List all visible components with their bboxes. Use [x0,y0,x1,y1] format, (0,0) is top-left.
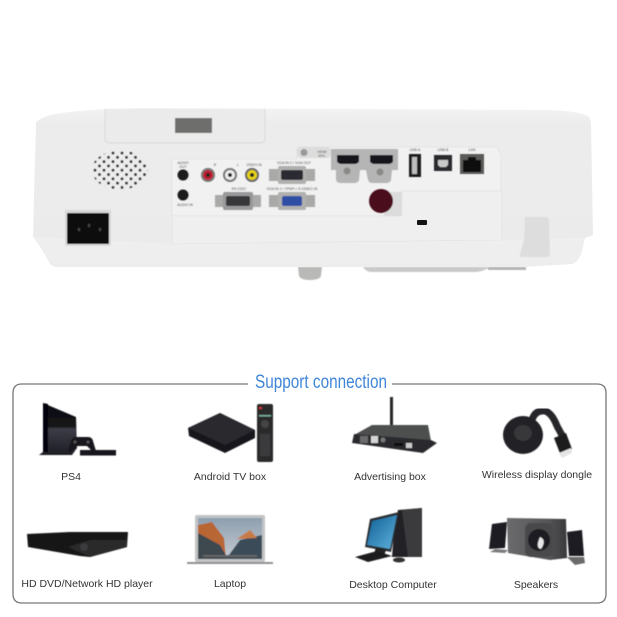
audio ports: AUDIO IN [177,203,193,207]
device: Desktop Computer [349,508,437,591]
HDMI ports [331,149,398,183]
icon: speaker set [489,518,585,565]
label: Desktop Computer [349,579,437,591]
USB and LAN ports: USB-B [438,148,449,152]
icon: TV box and remote [188,404,273,462]
USB and LAN ports: USB-A [410,148,421,152]
VGA and serial ports: VGA IN 1 / YPbPr / S-VIDEO IN [267,187,318,191]
HDMI badge: HDMI [318,150,326,154]
USB and LAN ports [409,148,484,177]
device: Laptop [187,515,273,590]
icon: dongle [503,411,572,458]
USB and LAN ports: LAN [469,148,476,152]
projector feet and underside [298,267,526,280]
dark red receiver window [369,189,402,216]
audio ports: AUDIO [177,161,189,165]
device: PS4 [39,403,116,483]
icon: desktop computer [355,508,422,562]
device: HD DVD player [21,532,153,590]
panel border [13,384,606,603]
projector body [33,108,593,267]
label: PS4 [61,471,81,483]
icon: PS4 console [39,403,116,456]
connector panel recess [172,147,501,216]
VGA and serial ports: RS-232C [232,187,247,191]
audio ports: OUT [179,165,188,169]
lower bevel [33,237,585,267]
RCA ports: L [237,163,239,167]
icon: laptop [187,515,273,564]
HDMI badge [297,147,331,158]
top lid with display window [105,109,265,143]
VGA and serial ports: VGA IN 2 / VGA OUT [277,161,312,165]
label: Advertising box [354,471,427,483]
speaker grille [92,150,148,190]
icon: DVD player [27,532,128,557]
HDMI badge: MHL [318,154,326,158]
device: Wireless display dongle [482,411,592,481]
label: Laptop [214,578,246,590]
device: Speakers [489,518,585,591]
label: Android TV box [194,471,267,483]
power socket [65,210,111,246]
label: Speakers [514,579,558,591]
audio ports [177,161,193,207]
RCA ports [201,163,262,182]
icon: media box with antenna [352,397,437,453]
panel: support connection [13,372,606,603]
side cutout [520,217,550,257]
label: HD DVD/Network HD player [21,578,153,590]
device: Advertising box [352,397,437,483]
security slot [417,220,427,225]
lower cover [172,191,502,244]
device: Android TV box [188,404,273,483]
projector [33,108,593,280]
label: Wireless display dongle [482,469,592,481]
RCA ports: R [214,163,217,167]
RCA ports: VIDEO IN [246,163,262,167]
VGA and serial ports [215,161,318,210]
heading: Support connection [255,372,387,393]
